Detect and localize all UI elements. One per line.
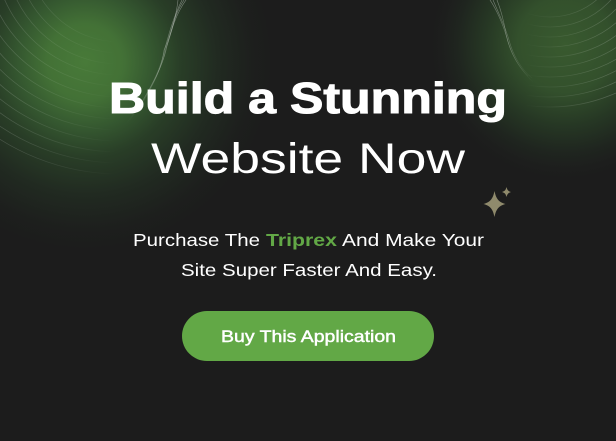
- left wave lines: [126, 0, 186, 124]
- button: [182, 311, 434, 361]
- subtitle line 2: Site Super Faster And Easy.: [181, 260, 437, 280]
- subtitle line 1: [133, 230, 484, 250]
- subtitle line 1: And Make Your: [342, 230, 484, 250]
- left green glow: [0, 0, 275, 252]
- subtitle line 1: Triprex: [266, 230, 337, 250]
- left concentric arcs: [0, 0, 345, 174]
- subtitle line 1: Purchase The: [133, 230, 260, 250]
- right green glow: [430, 0, 616, 180]
- icon: sparkles: [484, 187, 511, 217]
- button background: [182, 311, 434, 361]
- title line 2: Website Now: [151, 135, 466, 183]
- right concentric arcs: [388, 0, 616, 107]
- right wave lines: [490, 0, 535, 84]
- title line 1: Build a Stunning: [109, 74, 507, 123]
- button label: Buy This Application: [221, 328, 396, 346]
